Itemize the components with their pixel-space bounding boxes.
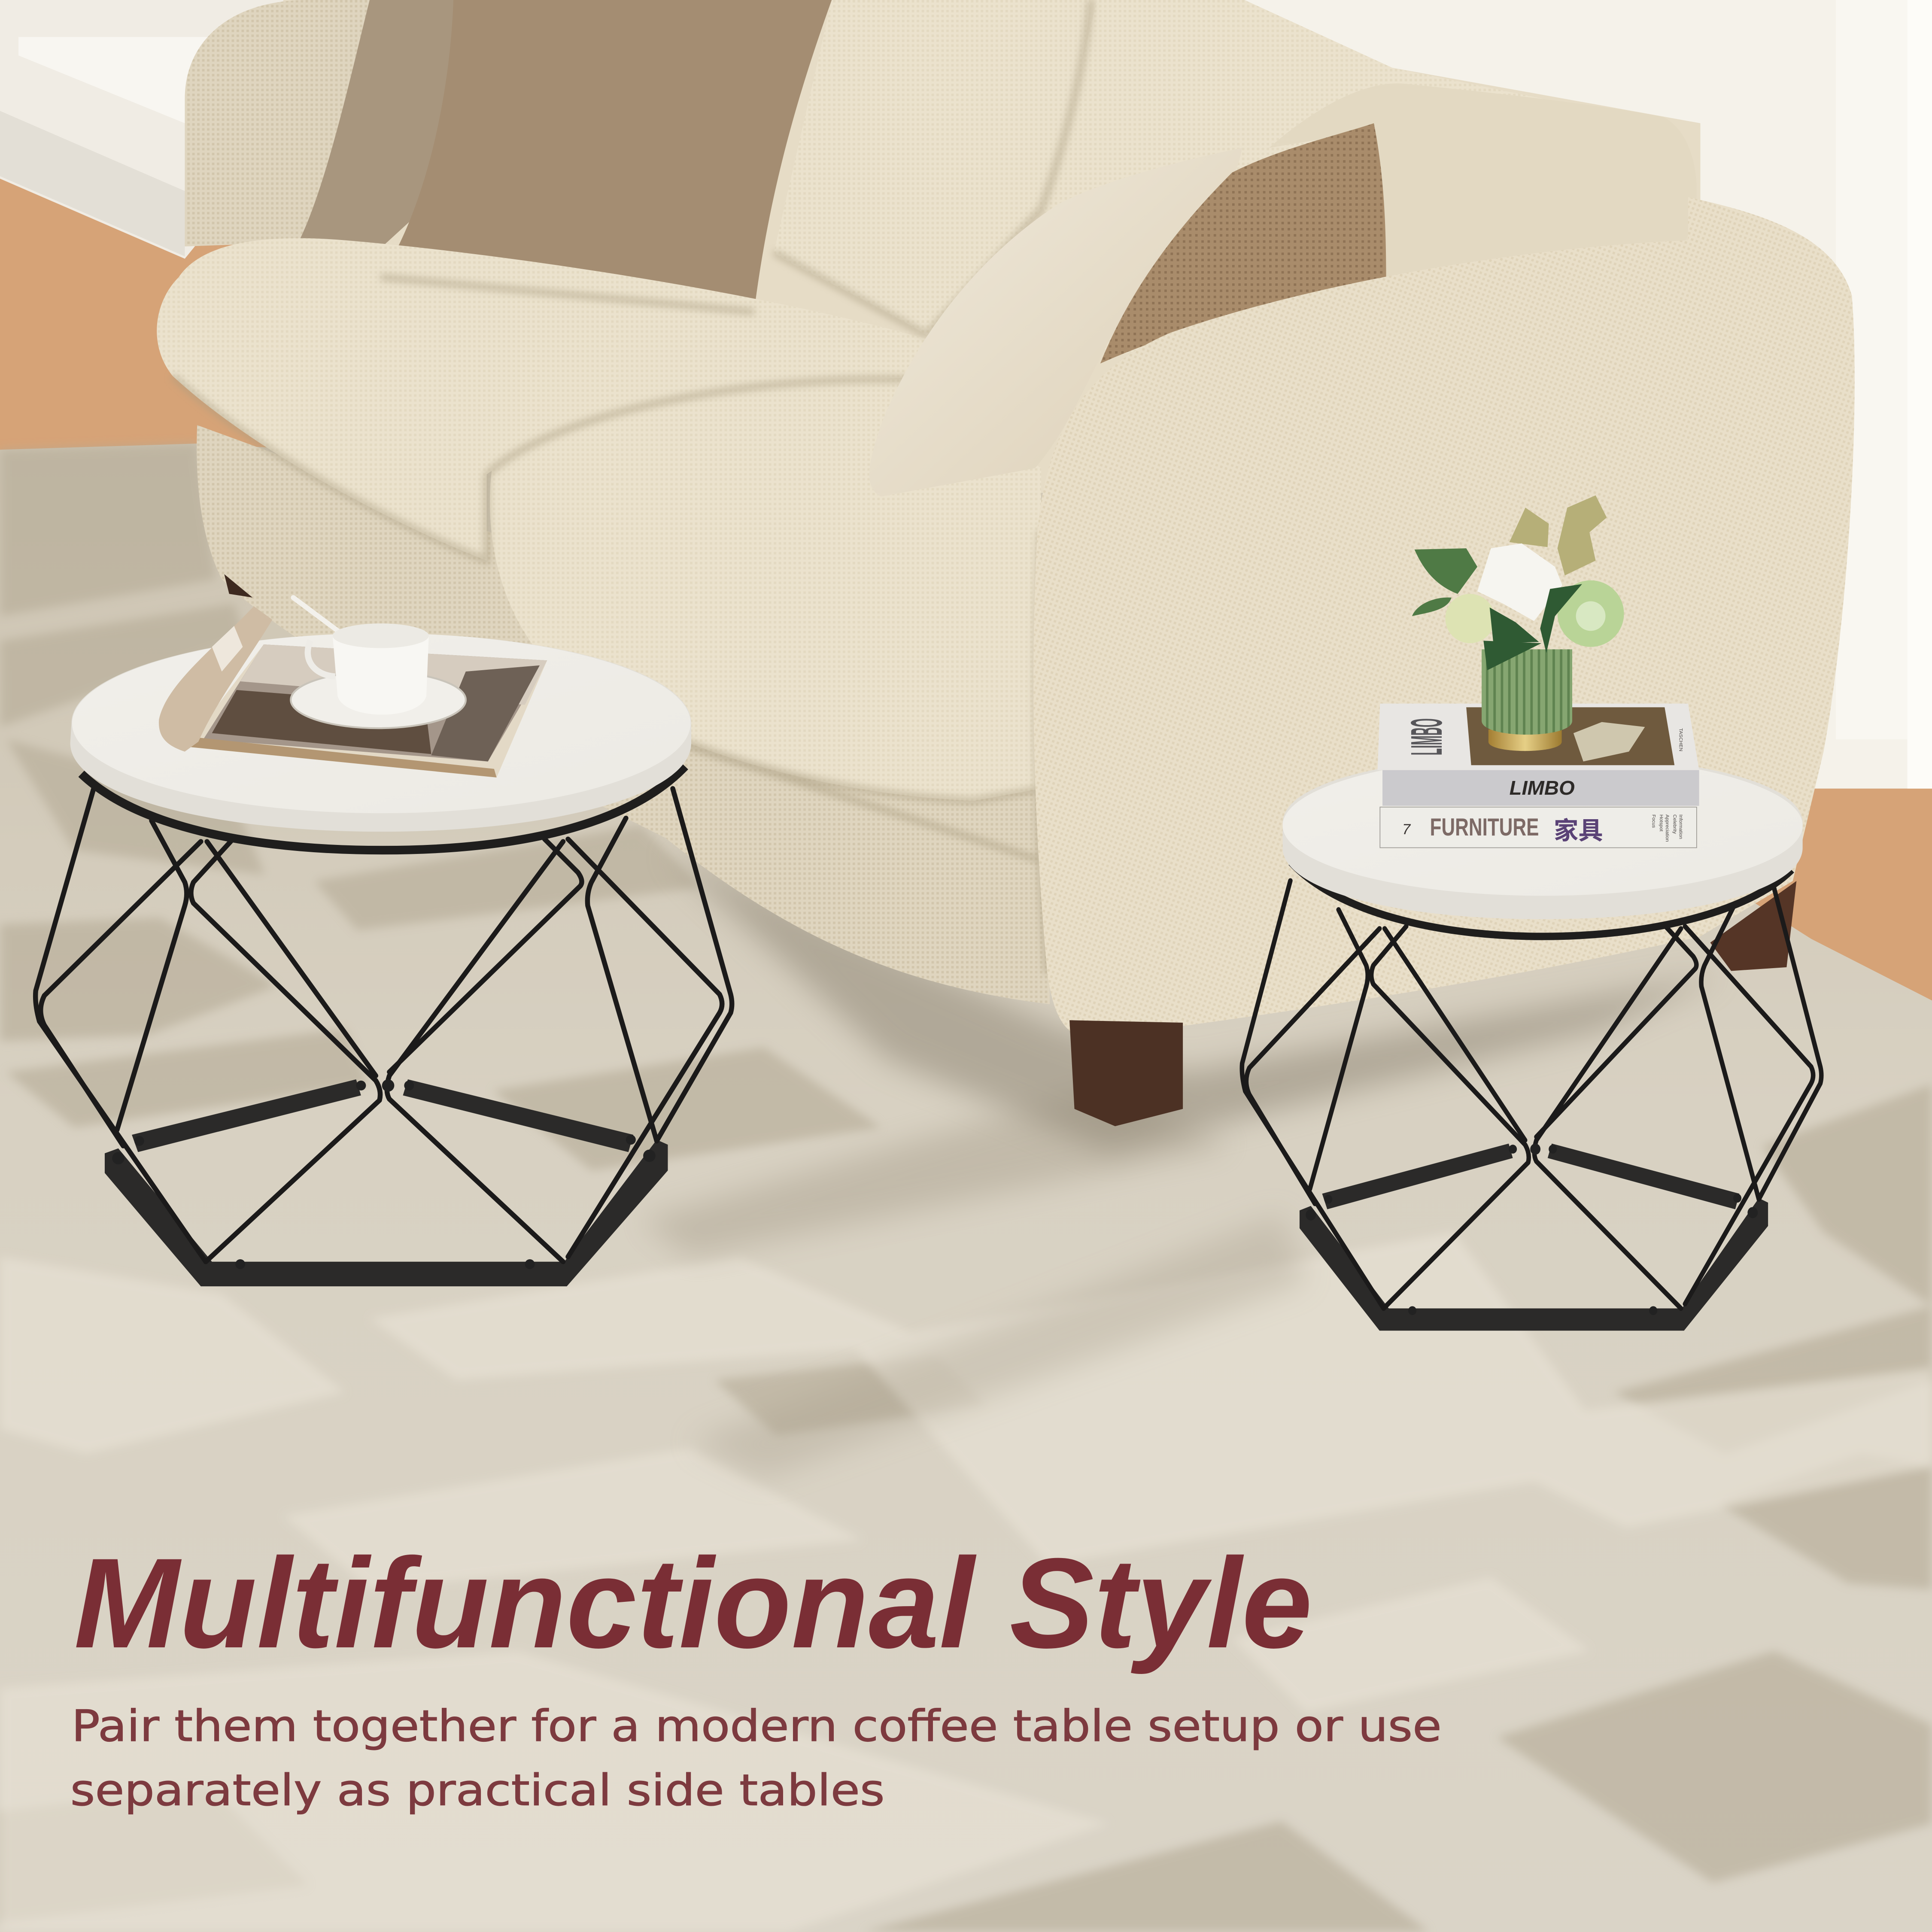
pillow: brown rear bbox=[299, 0, 456, 252]
rug bbox=[0, 444, 1932, 1932]
seat cushion: left bbox=[157, 238, 927, 561]
magazine bbox=[159, 606, 547, 778]
headline: Multifunctional Style bbox=[74, 1532, 1312, 1675]
subtitle text: Pair them together for a modern coffee table setup or use bbox=[71, 1701, 1442, 1751]
right table bbox=[1242, 495, 1821, 1331]
upholstery creases bbox=[173, 0, 1682, 973]
rug shadow bbox=[690, 1214, 1306, 1479]
subtitle text: separately as practical side tables bbox=[70, 1765, 885, 1815]
pillow: brown knit bbox=[1100, 123, 1386, 364]
book: lower: FURNITURE bbox=[1430, 814, 1539, 841]
sofa leg: front bbox=[1069, 1020, 1183, 1126]
sofa base bbox=[197, 425, 1050, 1004]
book: lower: 家具 bbox=[1554, 817, 1603, 844]
book: upper: TASCHEN bbox=[1678, 728, 1683, 751]
sofa backrest bbox=[246, 0, 1700, 493]
sofa left arm bbox=[185, 0, 370, 246]
rug patches bbox=[0, 444, 1932, 1932]
back cushion: centre bbox=[774, 0, 1091, 335]
book: lower: 7 bbox=[1402, 821, 1411, 838]
right table: LIMBO bbox=[1401, 718, 1451, 755]
book: lower: Focus bbox=[1651, 814, 1656, 828]
back cushion: right bbox=[1041, 0, 1602, 357]
book: upper bbox=[1378, 704, 1699, 806]
pillow: brown front bbox=[381, 0, 832, 312]
subtitle text bbox=[70, 1701, 1442, 1815]
book: lower: Appreciation bbox=[1665, 814, 1670, 842]
sofa bbox=[157, 0, 1855, 1126]
sofa leg: left bbox=[224, 574, 252, 598]
metal frame bbox=[36, 766, 732, 1286]
background: white wall and skirting bbox=[0, 0, 394, 259]
pillow: cream rear right bbox=[1269, 83, 1697, 289]
marble top bbox=[1283, 755, 1803, 919]
book: lower: Celebrity bbox=[1672, 814, 1677, 834]
pillow: white fleece bbox=[869, 148, 1242, 497]
base bars bbox=[105, 1079, 668, 1286]
marble top bbox=[70, 633, 691, 832]
sofa leg: rear bbox=[1710, 881, 1796, 971]
metal frame bbox=[1242, 881, 1821, 1331]
book: lower: Information bbox=[1678, 814, 1683, 839]
book: lower: Hotspot bbox=[1659, 814, 1664, 832]
left table bbox=[36, 598, 732, 1286]
cup and saucer bbox=[291, 598, 466, 728]
sofa right arm bbox=[1033, 197, 1855, 1038]
seat cushion: right bbox=[490, 379, 1041, 801]
vase with flowers bbox=[1412, 495, 1624, 751]
book: upper: LIMBO bbox=[1510, 777, 1575, 799]
book: lower bbox=[1380, 807, 1697, 848]
background: sheer curtain bbox=[1207, 0, 1932, 789]
